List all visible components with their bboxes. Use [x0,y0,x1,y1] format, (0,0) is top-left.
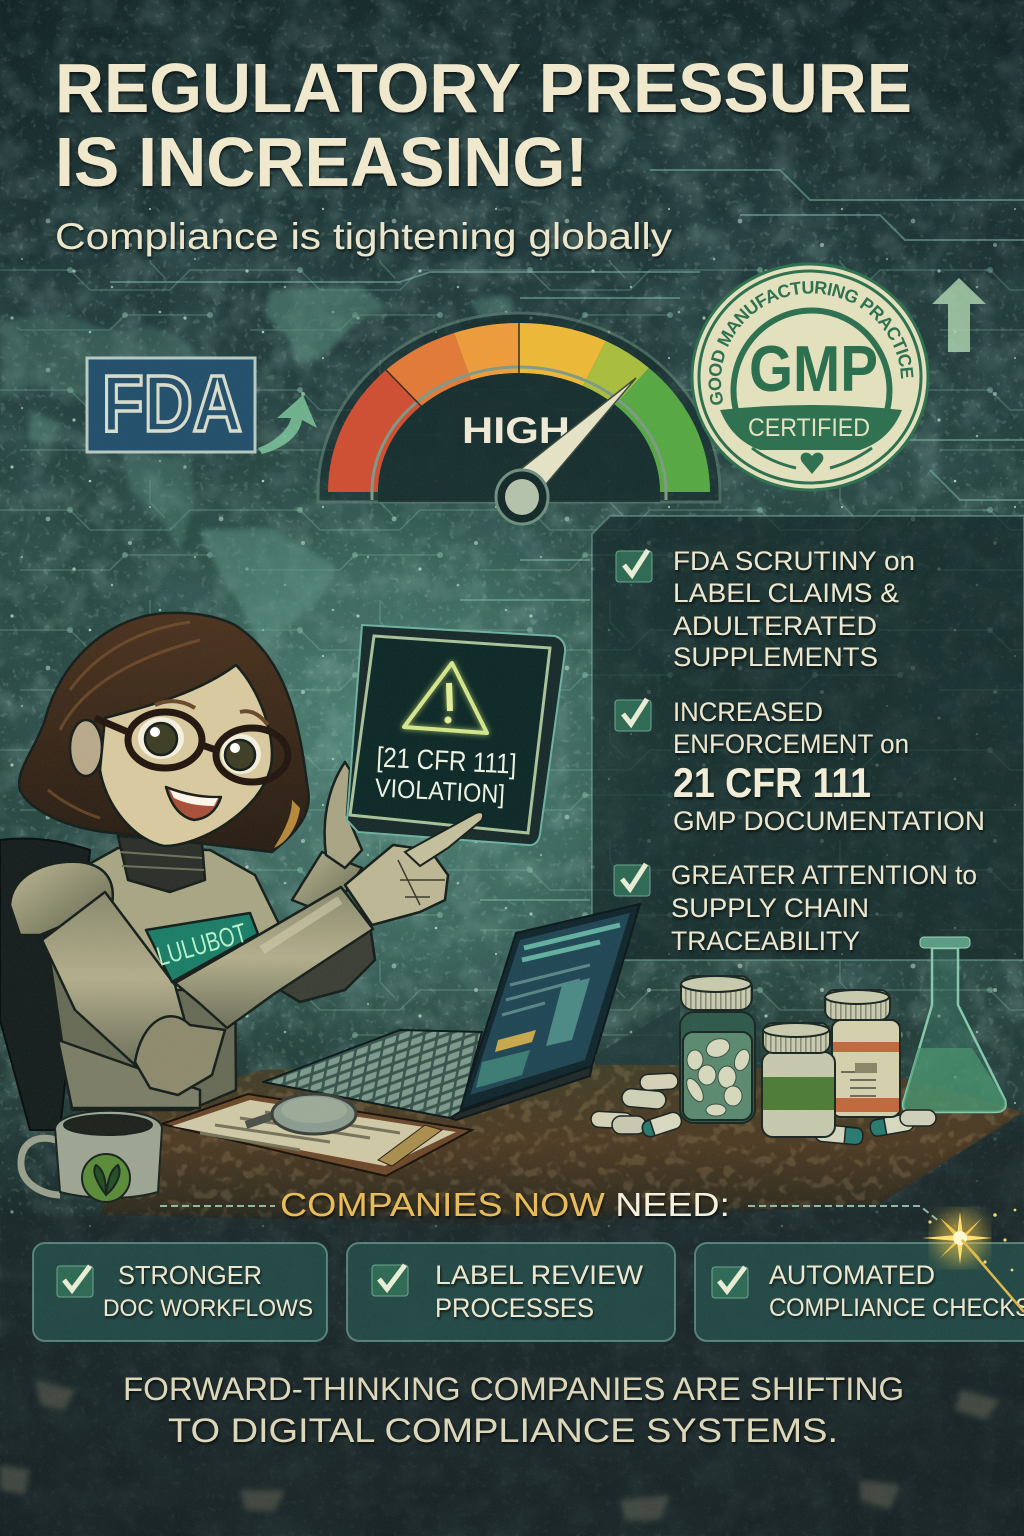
closing statement [123,1371,904,1450]
checklist item 2: GMP DOCUMENTATION [673,806,985,836]
laptop keyboard [263,1030,482,1118]
panel: label review processes [347,1243,675,1341]
box text [103,1260,313,1322]
pointing finger over tablet [405,812,483,866]
checklist item 2: INCREASED [673,697,823,727]
checklist item 3: GREATER ATTENTION to [671,860,977,890]
icon: check [712,1267,748,1298]
icon: check 2 [615,699,651,731]
eyebrows [155,701,268,725]
checklist item 2: 21 CFR 111 [673,759,871,806]
title: REGULATORY PRESSURE [55,49,912,127]
face [100,665,272,846]
mouth [166,787,221,820]
hand holding tablet [325,762,362,868]
circuit traces [110,170,1024,900]
forearm [175,887,373,1028]
lower hand [135,1016,225,1095]
checklist item 3 [671,860,977,956]
chair [0,838,90,1130]
icon: check [57,1266,93,1297]
box text: DOC WORKFLOWS [103,1295,313,1322]
icon: upward arrow near FDA [258,395,317,454]
needs heading: COMPANIES NOW NEED: [280,1186,730,1223]
clipboard with document [162,1094,472,1176]
title: IS INCREASING! [55,123,588,201]
world map [0,285,515,650]
background keyboard behind jars [595,1005,680,1065]
neck [118,836,205,892]
checklist item 2: ENFORCEMENT on [673,729,909,759]
ear [70,720,102,776]
GMP certified seal [690,262,930,492]
pills and capsules [591,1073,936,1145]
icon: check 1 [616,550,652,582]
box text [435,1260,644,1323]
laptop screen [460,904,640,1110]
gauge [318,313,720,524]
panel: stronger doc workflows [33,1243,327,1341]
GMP certified seal: CERTIFIED [748,414,870,442]
needs heading [160,1186,940,1223]
supplement bottle: glass jar [680,976,755,1123]
checklist item 3: TRACEABILITY [671,926,860,956]
chest armor [82,848,282,990]
icon: coffee mug [21,1111,162,1202]
icon: magnifying glass [246,1094,356,1134]
desk [100,1060,1024,1230]
gauge hub [496,470,548,524]
checklist item 1: LABEL CLAIMS & [673,578,899,608]
laptop [263,904,640,1120]
closing statement: TO DIGITAL COMPLIANCE SYSTEMS. [168,1412,838,1450]
icon: check 3 [614,864,650,896]
checklist item 1 [673,546,915,672]
name plate [146,913,258,982]
checklist item 3: SUPPLY CHAIN [671,893,869,923]
box text: AUTOMATED [769,1260,935,1290]
lower dark band [0,1112,1024,1536]
tablet text: VIOLATION] [374,772,506,809]
pointing hand [345,845,448,925]
subtitle: Compliance is tightening globally [55,216,673,257]
checklist item 1: SUPPLEMENTS [673,642,878,672]
supplement bottle: green label [762,1023,835,1137]
lower torso [50,960,236,1110]
eyes [138,717,261,774]
glasses [95,712,288,782]
title [55,49,912,201]
icon: erlenmeyer flask [903,937,1006,1112]
icon: check [372,1265,408,1296]
checklist item 2 [673,697,985,836]
tablet text [374,741,517,810]
GMP certified seal: GOOD MANUFACTURING PRACTICE [708,281,914,405]
shoulder [10,862,113,935]
box text: LABEL REVIEW [435,1260,644,1290]
rocks decoration [0,1380,1000,1520]
gauge label: HIGH [462,410,570,451]
character: Lulubot [10,613,448,1110]
gauge needle [512,378,636,490]
supplement bottle: orange label [825,990,900,1117]
checklist item 1: ADULTERATED [673,611,877,641]
closing statement: FORWARD-THINKING COMPANIES ARE SHIFTING [123,1371,904,1407]
hair [19,613,309,852]
GMP certified seal: GMP [749,332,878,405]
tablet with violation warning [347,625,565,845]
mech joint behind forearm [280,925,375,1002]
icon: up arrow top right [932,278,986,352]
FDA logo badge: FDA [102,359,242,448]
box text [769,1260,1024,1322]
icon: warning triangle [404,663,487,733]
name plate: LULUBOT [153,918,250,972]
checklist item 1: FDA SCRUTINY on [673,546,915,576]
panel: regulatory checklist [592,516,1024,960]
tablet text: [21 CFR 111] [376,741,517,780]
far arm holding tablet [292,852,362,915]
box text: PROCESSES [435,1293,594,1323]
upper arm [42,892,190,1065]
box text: STRONGER [118,1260,262,1290]
panel: automated compliance checks [695,1243,1024,1341]
icon: gold sparkle [922,1209,1024,1312]
